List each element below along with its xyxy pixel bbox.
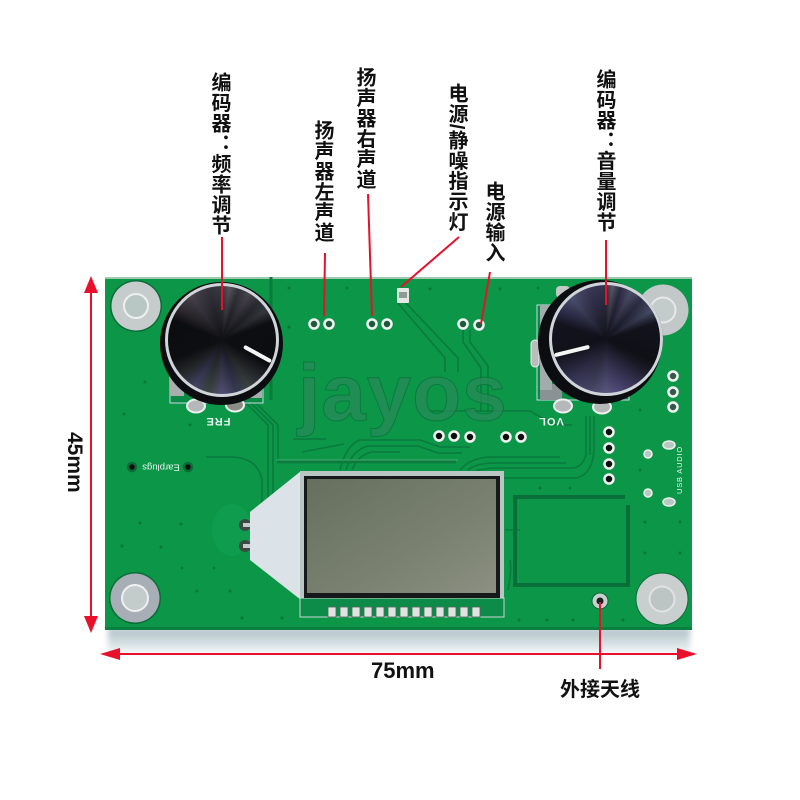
label: volume encoder: 编码器：音量调节 — [593, 69, 615, 232]
antenna pad — [592, 593, 608, 609]
label: frequency encoder: 编码器：频率调节 — [208, 72, 230, 235]
LCD tab and pins — [212, 471, 301, 600]
watermark: jayos: jayos — [296, 348, 508, 437]
silkscreen labels — [142, 415, 684, 494]
silkscreen labels: FRE — [206, 415, 230, 427]
callout line: right speaker — [368, 194, 372, 316]
height arrow — [84, 276, 98, 633]
traces — [206, 302, 594, 590]
label: height 45mm: 45mm — [63, 432, 86, 493]
solder pads — [128, 320, 678, 484]
silkscreen labels: VOL — [538, 415, 564, 427]
callout line: volume encoder — [605, 240, 607, 305]
silkscreen labels: Earplugs — [142, 461, 180, 472]
left knob — [160, 282, 283, 405]
label: width 75mm: 75mm — [371, 658, 435, 683]
label: power input: 电源输入 — [482, 181, 504, 263]
encoder bases — [170, 286, 629, 414]
mounting holes — [109, 280, 688, 625]
label: right speaker channel: 扬声器右声道 — [353, 67, 375, 189]
callout line: antenna — [599, 602, 601, 669]
label: external antenna: 外接天线 — [560, 679, 640, 701]
right knob — [538, 280, 663, 404]
indicator LED — [397, 288, 409, 303]
callout line: left speaker — [324, 253, 325, 316]
silkscreen labels: USB AUDIO — [675, 446, 684, 494]
label: power and mute indicator: 电源/静噪指示灯 — [445, 83, 467, 232]
width arrow — [100, 648, 697, 660]
callout line: power input — [481, 272, 490, 324]
callout line: frequency encoder — [221, 237, 223, 310]
antenna rectangle — [515, 497, 628, 585]
via dots — [120, 286, 682, 622]
label: left speaker channel: 扬声器左声道 — [311, 120, 333, 242]
LCD screen — [300, 471, 504, 617]
callout line: indicator LED — [401, 237, 459, 287]
